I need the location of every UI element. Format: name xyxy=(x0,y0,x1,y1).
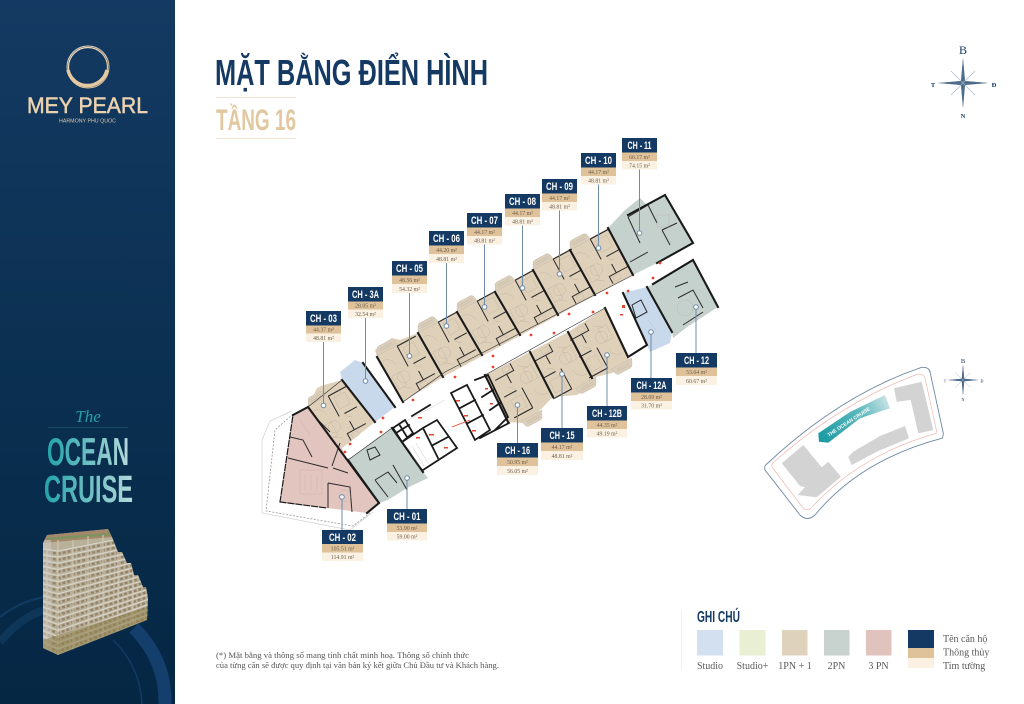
label: CH-08: 44.17 m² xyxy=(512,211,533,217)
label: CH-3A: CH - 3A xyxy=(352,289,379,301)
label: CH-15: CH - 15 xyxy=(550,430,574,442)
label: CH-12B: CH - 12B xyxy=(592,408,622,420)
icon: compass: T xyxy=(931,82,936,89)
terrace outline xyxy=(262,411,373,530)
icon: compass: N xyxy=(961,113,966,120)
icon: small compass: N xyxy=(962,397,965,402)
label: CH-01: 59.00 m² xyxy=(397,534,418,540)
label: CH-12A: CH - 12A xyxy=(636,380,667,392)
panel: sidebar xyxy=(0,0,175,704)
legend labels: Studio xyxy=(697,661,723,672)
unit CH-15 xyxy=(530,332,592,397)
icon: small compass: T xyxy=(944,378,947,384)
label: CH-09: 44.17 m² xyxy=(549,196,570,202)
icon: small compass: B xyxy=(961,358,966,365)
units CH-06 to CH-10 xyxy=(418,228,633,377)
subtitle: TẦNG 16 xyxy=(216,103,296,137)
balconies xyxy=(305,232,636,428)
label: CH-12 xyxy=(676,305,717,385)
legend heading: GHI CHÚ xyxy=(697,607,740,626)
label: CH-12A xyxy=(631,330,672,410)
label: CH-03: 48.81 m² xyxy=(313,336,334,342)
label: CH-01: 53.90 m² xyxy=(397,526,418,532)
label: CH-03 xyxy=(306,311,341,408)
highlighted block: The Ocean Cruise xyxy=(818,395,890,443)
footnote xyxy=(216,650,499,670)
subtitle xyxy=(216,97,296,139)
icon: compass: B xyxy=(959,43,967,57)
label: CH-07 xyxy=(467,213,502,309)
legend labels xyxy=(697,661,889,672)
party walls xyxy=(280,195,718,513)
core xyxy=(393,305,625,470)
label: CH-12B: 49.19 m² xyxy=(597,432,618,438)
label: CH-12B: 44.35 m² xyxy=(597,423,618,429)
label: CH-05: 54.32 m² xyxy=(399,287,420,293)
label: CH-16: 50.95 m² xyxy=(507,460,528,466)
highlighted block: The Ocean Cruise: THE OCEAN CRUISE xyxy=(827,406,872,438)
icon: small compass: Đ xyxy=(981,378,984,384)
label: CH-08: CH - 08 xyxy=(509,196,536,208)
label: CH-02 xyxy=(322,495,363,561)
icon: small compass xyxy=(944,358,984,402)
legend swatches xyxy=(697,630,892,656)
label: CH-15 xyxy=(541,372,583,460)
label: CH-06: 44.20 m² xyxy=(436,248,457,254)
legend labels: Studio+ xyxy=(737,661,769,672)
unit CH-12B xyxy=(568,308,630,378)
building illustration xyxy=(43,529,148,655)
label: CH-3A xyxy=(348,287,383,383)
unit CH-11: 2 PN xyxy=(608,195,693,275)
label: CH-05 xyxy=(392,261,427,358)
label: CH-09: CH - 09 xyxy=(546,181,573,193)
label: CH-07: 44.17 m² xyxy=(474,230,495,236)
label: CH-10: 48.81 m² xyxy=(588,178,609,184)
label: CH-09 xyxy=(542,179,577,276)
label: CH-06 xyxy=(429,231,464,328)
logo: HARMONY PHU QUOC xyxy=(59,118,116,124)
label: CH-01: CH - 01 xyxy=(394,511,420,523)
legend key: label card xyxy=(908,630,989,672)
legend key: label card: Tên căn hộ xyxy=(943,634,987,645)
unit CH-3A: studio xyxy=(340,360,395,422)
label: CH-05: CH - 05 xyxy=(396,263,423,275)
site key plan xyxy=(765,358,984,518)
footnote: (*) Mặt bằng và thông số mang tính chất minh hoạ. Thông số chính thức xyxy=(216,650,469,660)
label: CH-03: CH - 03 xyxy=(310,313,337,325)
label: CH-05: 48.56 m² xyxy=(399,278,420,284)
label: CH-01 xyxy=(387,476,427,540)
label: CH-03: 44.37 m² xyxy=(313,328,334,334)
label: CH-12: 60.67 m² xyxy=(686,379,707,385)
label: CH-11 xyxy=(622,138,657,235)
label: CH-3A: 28.05 m² xyxy=(355,304,376,310)
project name xyxy=(44,407,133,511)
corridor markers xyxy=(344,262,661,453)
label: CH-16: 56.05 m² xyxy=(507,469,528,475)
label: CH-12A: 31.70 m² xyxy=(641,404,662,410)
legend key: label card: Thông thủy xyxy=(943,648,989,658)
label: CH-08: 48.81 m² xyxy=(512,220,533,226)
legend labels: 3 PN xyxy=(868,661,889,672)
logo: MEY PEARL xyxy=(27,93,148,118)
unit CH-05 xyxy=(375,333,443,402)
title: MẶT BẰNG ĐIỂN HÌNH xyxy=(215,51,488,93)
label: CH-07: CH - 07 xyxy=(471,215,498,227)
project name: CRUISE xyxy=(44,469,133,511)
label: CH-12: 53.64 m² xyxy=(686,370,707,376)
project name: OCEAN xyxy=(47,431,129,474)
legend key: label card: Tim tường xyxy=(943,661,985,672)
logo xyxy=(27,46,148,124)
neighbouring blocks xyxy=(782,382,933,497)
sidebar wave arcs xyxy=(0,597,165,704)
unit fills xyxy=(280,195,718,513)
label: CH-12: CH - 12 xyxy=(684,355,709,367)
label: CH-02: 114.91 m² xyxy=(331,555,354,561)
setback line xyxy=(772,374,937,510)
project name: The xyxy=(75,407,101,426)
unit CH-12A: studio xyxy=(623,287,672,352)
label: CH-15: 44.17 m² xyxy=(552,445,573,451)
footnote: của từng căn sẽ được quy định tại văn bản ký kết giữa Chủ Đầu tư và Khách hàng. xyxy=(216,660,499,670)
label: CH-15: 48.81 m² xyxy=(552,454,573,460)
label: CH-06: 48.81 m² xyxy=(436,257,457,263)
unit interiors xyxy=(288,205,703,512)
label: CH-16: CH - 16 xyxy=(505,445,530,457)
legend xyxy=(681,607,989,672)
unit CH-01: 2 PN xyxy=(348,428,428,503)
icon: compass xyxy=(931,43,997,120)
label: CH-08 xyxy=(505,194,540,290)
floor plan xyxy=(262,195,718,530)
unit CH-03 xyxy=(308,380,375,448)
label: CH-11: CH - 11 xyxy=(628,140,652,152)
label: CH-02: CH - 02 xyxy=(329,532,356,544)
label: CH-10: 44.17 m² xyxy=(588,170,609,176)
label: CH-07: 48.81 m² xyxy=(474,238,495,244)
icon: compass: Đ xyxy=(992,82,997,89)
label: CH-10 xyxy=(581,153,616,250)
label: CH-02: 105.51 m² xyxy=(331,546,355,552)
label: CH-10: CH - 10 xyxy=(585,155,612,167)
label: CH-12A: 28.09 m² xyxy=(641,395,662,401)
unit CH-12: 2 PN xyxy=(647,260,718,338)
unit CH-02: 3 PN xyxy=(280,407,379,513)
label: CH-11: 66.17 m² xyxy=(629,155,650,161)
label: CH-09: 48.81 m² xyxy=(549,204,570,210)
label: CH-16 xyxy=(497,403,538,475)
legend labels: 2PN xyxy=(828,661,845,672)
label: CH-11: 74.15 m² xyxy=(629,164,650,170)
label: CH-3A: 32.54 m² xyxy=(355,312,376,318)
label: CH-12B xyxy=(587,353,627,438)
unit CH-16 xyxy=(485,352,553,423)
label: CH-06: CH - 06 xyxy=(433,233,460,245)
site boundary xyxy=(765,367,943,518)
legend labels: 1PN + 1 xyxy=(778,661,812,672)
